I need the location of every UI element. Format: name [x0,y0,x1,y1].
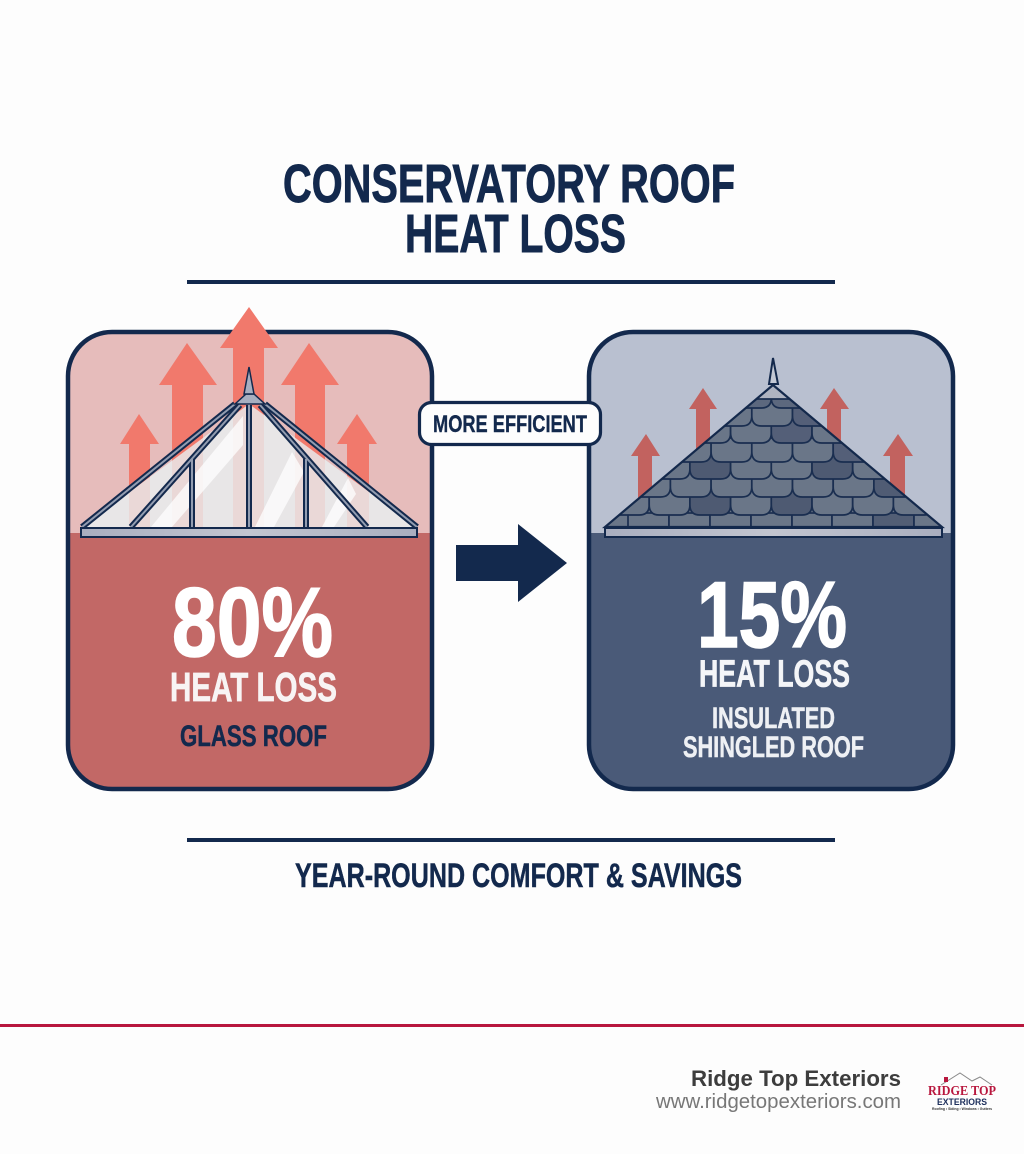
footer rule [0,1024,1024,1027]
callout: more efficient: MORE EFFICIENT [433,411,587,438]
panel background [66,330,434,790]
callout: more efficient [420,402,600,444]
label: heat loss: HEAT LOSS [170,664,337,710]
tagline: YEAR-ROUND COMFORT & SAVINGS [295,857,742,895]
panel background [587,330,955,790]
stat: 15%: 15% [697,562,847,667]
arrow: glass to shingled [456,524,567,602]
logo [928,1073,996,1111]
panel border [589,332,953,789]
label: insulated shingled roof: INSULATED [712,702,835,735]
glass roof illustration [81,367,417,537]
logo: EXTERIORS [937,1097,987,1108]
footer brand: Ridge Top Exteriors [691,1066,901,1091]
bottom divider [187,838,835,842]
stat: 80%: 80% [172,567,333,677]
footer url: www.ridgetopexteriors.com [655,1091,901,1113]
shingled roof illustration [602,358,945,538]
title: HEAT LOSS [405,204,626,264]
heat arrows [631,388,913,510]
logo: Roofing • Siding • Windows • Gutters [932,1107,992,1111]
panel border [68,332,432,789]
label: insulated shingled roof [683,702,864,764]
title: CONSERVATORY ROOF [283,154,735,214]
panel: shingled roof [568,330,955,790]
heat arrows [120,307,377,528]
label: insulated shingled roof: SHINGLED ROOF [683,731,864,764]
title [283,154,735,264]
top divider [187,280,835,284]
panel: glass roof [66,307,434,790]
label: heat loss: HEAT LOSS [699,654,850,696]
label: glass roof: GLASS ROOF [180,720,327,753]
logo: RIDGE TOP [928,1083,996,1098]
